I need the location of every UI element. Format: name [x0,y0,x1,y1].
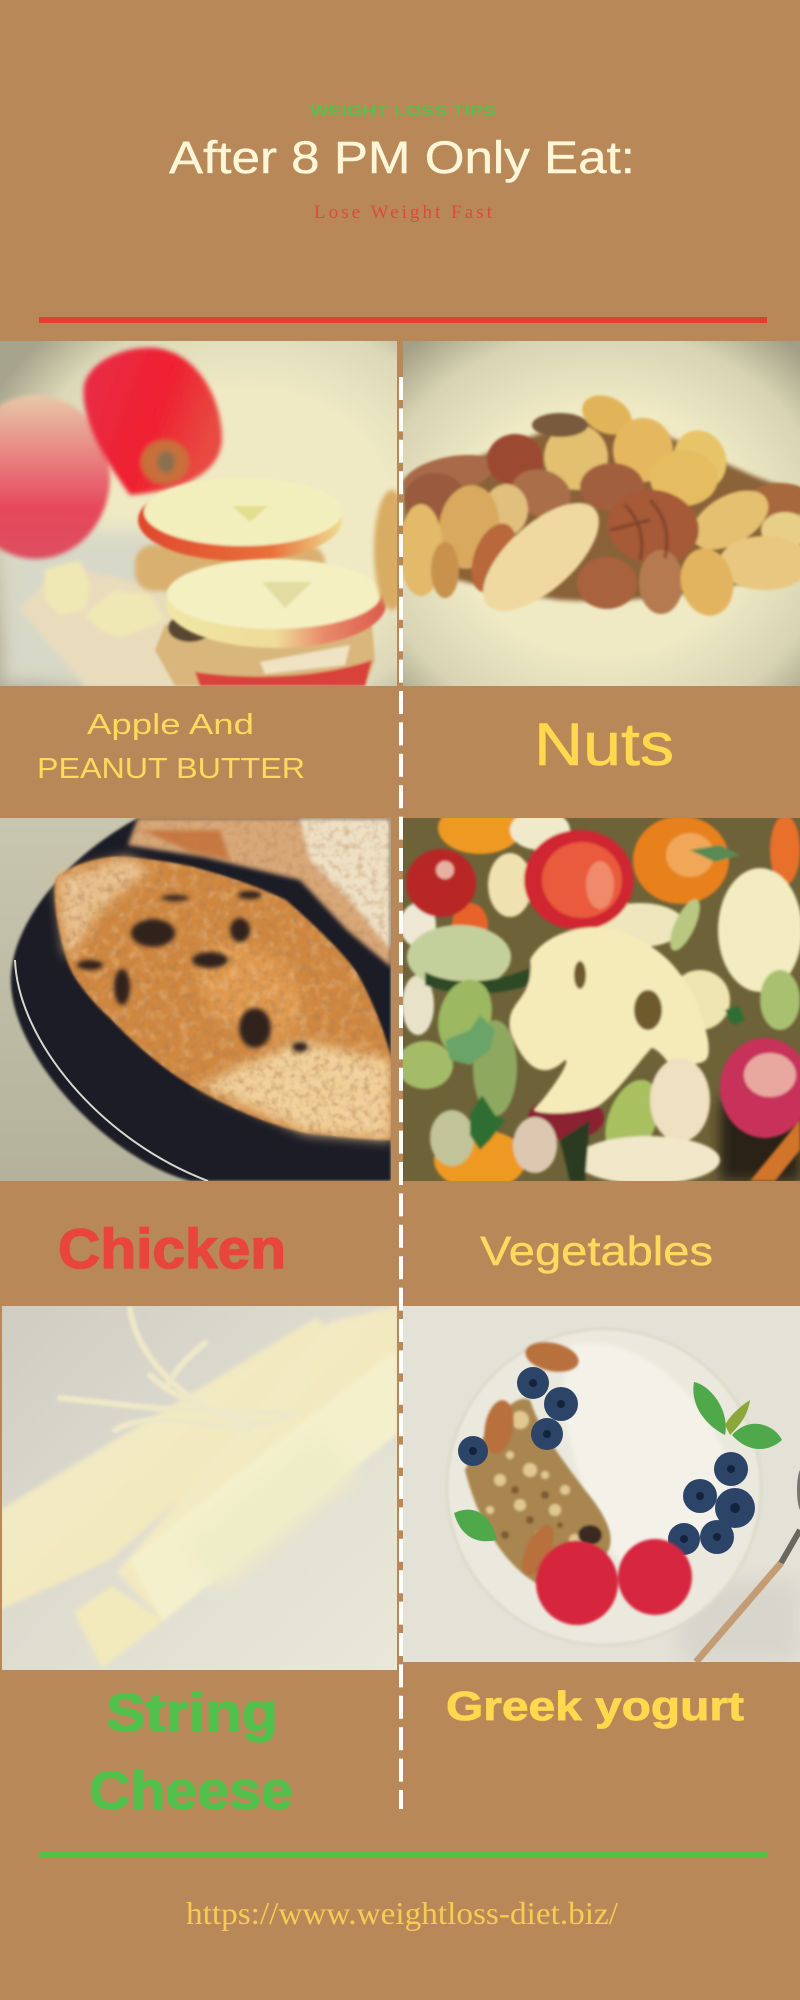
carrots [436,818,518,856]
photo: vegetable salad [397,802,800,1190]
wooden spoon [750,1120,800,1181]
label: chicken: Chicken [58,1217,286,1280]
strawberries [536,1539,692,1625]
cheese sticks [0,1306,397,1668]
dashed center divider [399,377,403,1809]
tomatoes [406,849,476,917]
bowl [447,1329,761,1645]
subtitle: Lose Weight Fast [314,202,493,223]
peanut butter layer upper [135,545,325,591]
photo: apple and peanut butter [0,341,410,686]
photo: mixed nuts [399,341,800,686]
label: apple and peanut butter: PEANUT BUTTER [37,753,305,785]
photo: string cheese [0,1306,397,1670]
cutting board [22,572,172,686]
label: string cheese: String [106,1683,278,1743]
cauliflower lower [650,1058,710,1142]
icon: left apple [0,395,110,559]
second chicken piece [128,818,391,967]
granola [465,1399,611,1585]
photo: greek yogurt bowl [403,1306,800,1662]
blueberries [458,1367,755,1555]
top red rule [39,317,767,323]
title: After 8 PM Only Eat: [169,132,635,183]
icon: back apple [84,348,222,495]
cheese stars [45,560,165,638]
mint leaves [454,1382,782,1541]
label: greek yogurt: Greek yogurt [446,1683,744,1729]
spoon [696,1468,800,1662]
bottom green rule [39,1852,767,1858]
label: vegetables: Vegetables [480,1228,713,1274]
eyebrow: weight loss tips: WEIGHT LOSS TIPS [310,103,496,120]
char marks [77,891,308,1052]
almonds [481,1338,581,1580]
pecan ridges [610,500,667,560]
peanut butter layer lower [155,614,375,686]
photo: grilled chicken [0,818,391,1181]
label: apple and peanut butter [37,709,305,785]
cucumbers [407,925,511,989]
label: apple and peanut butter: Apple And [87,709,254,741]
nuts pile [399,388,800,630]
cheese strings [57,1306,250,1433]
cauliflower main [509,927,709,1113]
label: string cheese: Cheese [89,1761,293,1821]
main chicken breast [55,857,391,1140]
cream background pieces [510,810,570,850]
lower apple slice [166,559,386,648]
parsley [445,845,745,1150]
label: nuts: Nuts [534,711,674,778]
footer url: https://www.weightloss-diet.biz/ [186,1895,618,1931]
upper apple slice [138,478,342,561]
yogurt [560,1343,731,1561]
right edge sliver [371,488,397,612]
label: string cheese [89,1683,293,1821]
